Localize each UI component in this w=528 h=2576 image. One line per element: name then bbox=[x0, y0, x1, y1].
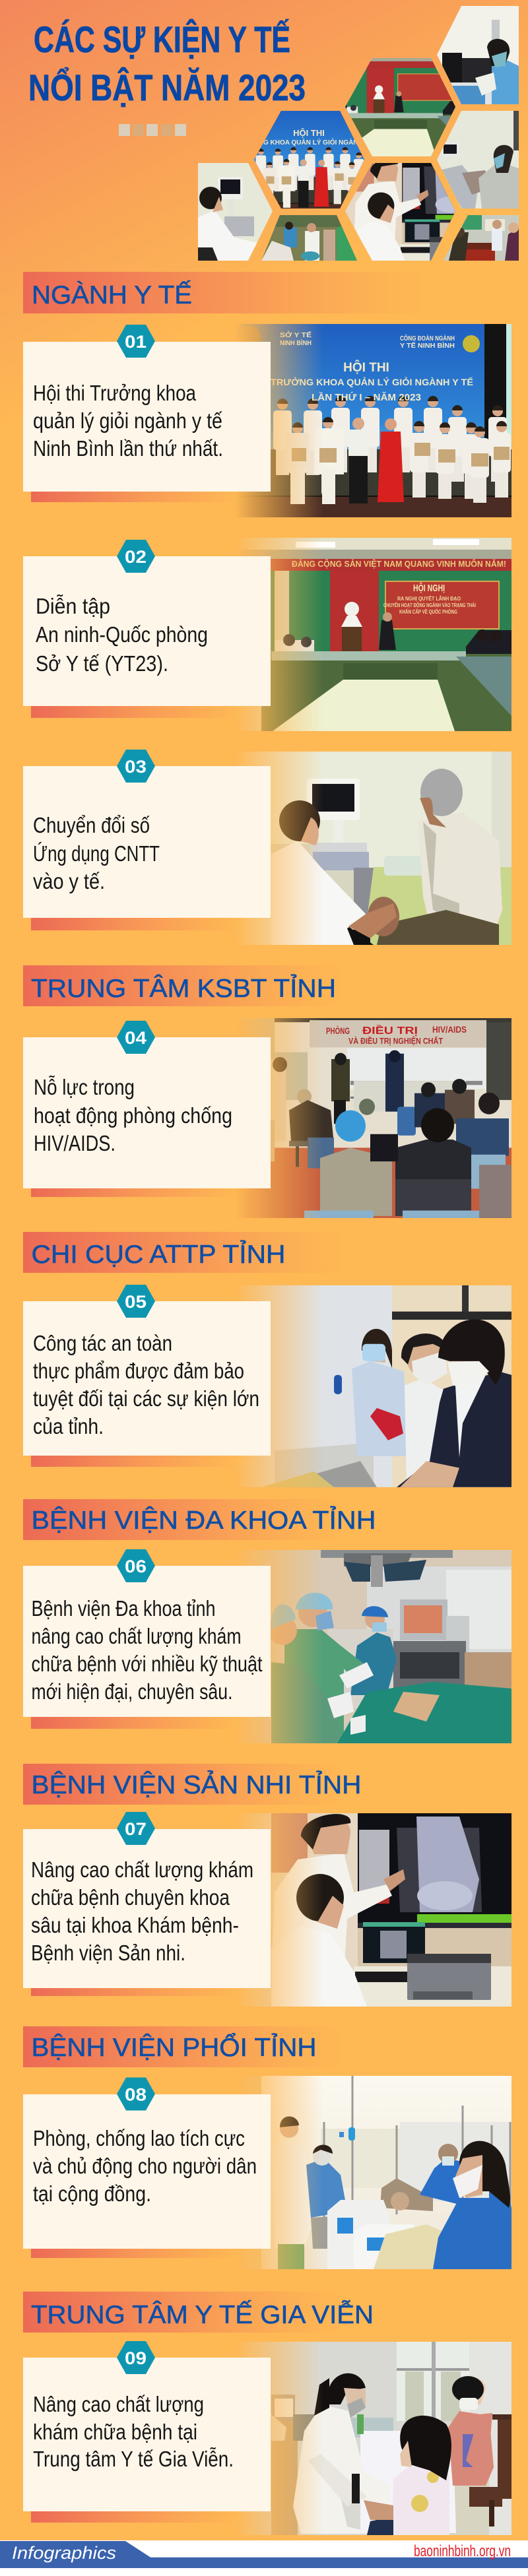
photo: award ceremony: LẦN THỨ I – NĂM 2023 bbox=[312, 391, 421, 403]
card text: Diễn tập bbox=[36, 594, 110, 618]
number badge bbox=[117, 1285, 155, 1318]
card text: và chủ động cho người dân bbox=[33, 2154, 257, 2178]
card text: Nâng cao chất lượng bbox=[33, 2392, 204, 2416]
card text bbox=[23, 1037, 271, 1188]
title: NỔI BẬT NĂM 2023 bbox=[28, 67, 306, 108]
footer: Infographics bbox=[12, 2543, 116, 2563]
number badge: 02 bbox=[125, 547, 147, 567]
number badge bbox=[117, 2341, 155, 2374]
card text bbox=[23, 2358, 271, 2511]
photo: defence drill meeting: RA NGHỊ QUYẾT LÃNH ĐẠO bbox=[397, 595, 461, 602]
section heading: CHI CỤC ATTP TỈNH bbox=[23, 1232, 426, 1273]
item 06 bbox=[23, 1549, 512, 1743]
card text: Chuyển đổi số bbox=[33, 813, 150, 837]
photo: award ceremony: SỞ Y TẾ bbox=[280, 331, 312, 339]
card text: thực phẩm được đảm bảo bbox=[33, 1359, 244, 1383]
number badge bbox=[117, 1549, 155, 1582]
footer bbox=[0, 2540, 528, 2576]
photo: defence drill meeting: CHUYỂN HOẠT ĐỘNG NGÀNH VÀO TRẠNG THÁI bbox=[383, 602, 476, 608]
card text bbox=[23, 2094, 271, 2249]
hexagon photo: ultrasound room bbox=[436, 111, 519, 210]
decorative squares bbox=[119, 124, 186, 136]
hexagon photo: meeting hall bbox=[345, 58, 455, 156]
photo: x-ray review bbox=[235, 1813, 512, 2007]
card text: nâng cao chất lượng khám bbox=[32, 1624, 242, 1648]
section heading: BỆNH VIỆN SẢN NHI TỈNH bbox=[23, 1764, 426, 1805]
hexagon photo: x-ray monitor bbox=[345, 163, 455, 261]
photo: HIV/AIDS treatment room: VÀ ĐIỀU TRỊ NGHIỆN CHẤT bbox=[348, 1036, 443, 1046]
photo: defence drill meeting: KHẨN CẤP VỀ QUỐC PHÒNG bbox=[399, 608, 457, 615]
number badge: 06 bbox=[125, 1557, 147, 1576]
card text: An ninh-Quốc phòng bbox=[36, 622, 208, 647]
card text: HIV/AIDS. bbox=[34, 1131, 116, 1155]
section heading: TRUNG TÂM Y TẾ GIA VIỄN: TRUNG TÂM Y TẾ GIA VIỄN bbox=[31, 2300, 374, 2329]
section heading: CHI CỤC ATTP TỈNH: CHI CỤC ATTP TỈNH bbox=[32, 1240, 285, 1269]
hexagon photo: community clinic bbox=[444, 215, 519, 261]
title: CÁC SỰ KIỆN Y TẾ bbox=[34, 18, 290, 60]
number badge: 04 bbox=[125, 1028, 147, 1048]
item 09 bbox=[23, 2341, 512, 2536]
number badge: 09 bbox=[125, 2348, 147, 2368]
card text: tại cộng đồng. bbox=[33, 2181, 151, 2206]
photo: ultrasound exam bbox=[235, 752, 512, 945]
card text bbox=[23, 1829, 271, 1988]
photo: operating room bbox=[235, 1550, 512, 1743]
card text: của tỉnh. bbox=[33, 1414, 104, 1438]
item 01 bbox=[23, 324, 512, 517]
card text: Bệnh viện Đa khoa tỉnh bbox=[32, 1596, 215, 1621]
card text: Trung tâm Y tế Gia Viễn. bbox=[33, 2447, 234, 2471]
number badge: 07 bbox=[125, 1819, 147, 1839]
section heading: TRUNG TÂM KSBT TỈNH: TRUNG TÂM KSBT TỈNH bbox=[31, 974, 336, 1003]
photo: award ceremony: Y TẾ NINH BÌNH bbox=[400, 341, 455, 350]
card text: Sở Y tế (YT23). bbox=[36, 651, 168, 676]
photo: award ceremony: NINH BÌNH bbox=[280, 338, 312, 347]
item 08 bbox=[23, 2076, 512, 2269]
item 05 bbox=[23, 1285, 512, 1487]
card text: Bệnh viện Sản nhi. bbox=[31, 1941, 185, 1965]
card text: Phòng, chống lao tích cực bbox=[33, 2126, 245, 2150]
item 02 bbox=[23, 538, 512, 731]
card text: chữa bệnh chuyên khoa bbox=[31, 1885, 230, 1910]
hexagon photo collage bbox=[198, 6, 519, 267]
photo: hospital ward bbox=[235, 2076, 512, 2269]
hexagon photo: award ceremony bbox=[254, 111, 364, 209]
section heading: BỆNH VIỆN ĐA KHOA TỈNH bbox=[23, 1499, 426, 1540]
photo: award ceremony: CÔNG ĐOÀN NGÀNH bbox=[400, 334, 455, 342]
card text: Ninh Bình lần thứ nhất. bbox=[33, 436, 223, 461]
hexagon photo: award ceremony: TRƯỞNG KHOA QUẢN LÝ GIỎI NGÀNH Y TẾ bbox=[239, 138, 380, 146]
section heading: NGÀNH Y TẾ: NGÀNH Y TẾ bbox=[32, 280, 192, 309]
card text: chữa bệnh với nhiều kỹ thuật bbox=[32, 1652, 263, 1676]
number badge bbox=[117, 540, 155, 573]
card text: hoạt động phòng chống bbox=[34, 1103, 232, 1128]
card text bbox=[23, 1566, 271, 1717]
photo: blood pressure check bbox=[235, 2342, 512, 2536]
number badge: 05 bbox=[125, 1292, 147, 1312]
number badge bbox=[117, 1812, 155, 1845]
hexagon photo: outdoor health check bbox=[261, 215, 357, 261]
item 07 bbox=[23, 1812, 512, 2007]
card text: khám chữa bệnh tại bbox=[33, 2420, 197, 2444]
card text: mới hiện đại, chuyên sâu. bbox=[32, 1679, 232, 1704]
card text: Nỗ lực trong bbox=[34, 1075, 135, 1099]
card text: Nâng cao chất lượng khám bbox=[31, 1857, 253, 1882]
number badge bbox=[117, 325, 155, 358]
title bbox=[28, 18, 306, 108]
hexagon photo: staff at printer bbox=[436, 6, 519, 105]
number badge bbox=[117, 1021, 155, 1054]
card text: sâu tại khoa Khám bệnh- bbox=[31, 1913, 239, 1937]
photo: HIV/AIDS treatment room: PHÒNG bbox=[326, 1025, 350, 1036]
photo: HIV/AIDS treatment room: HIV/AIDS bbox=[432, 1024, 467, 1035]
number badge: 01 bbox=[125, 332, 147, 352]
photo: defence drill meeting: ĐẢNG CỘNG SẢN VIỆT NAM QUANG VINH MUÔN NĂM! bbox=[292, 559, 506, 569]
photo: award ceremony: HỘI THI bbox=[343, 360, 389, 375]
photo: award ceremony bbox=[235, 324, 512, 517]
section heading: TRUNG TÂM Y TẾ GIA VIỄN bbox=[23, 2292, 426, 2333]
photo: food safety check bbox=[235, 1285, 512, 1487]
photo: HIV/AIDS treatment room bbox=[235, 1018, 512, 1218]
photo: defence drill meeting: HỘI NGHỊ bbox=[413, 582, 445, 594]
number badge: 03 bbox=[125, 757, 147, 777]
hexagon photo: award ceremony: HỘI THI bbox=[293, 128, 325, 138]
number badge bbox=[117, 2077, 155, 2110]
section heading: BỆNH VIỆN SẢN NHI TỈNH: BỆNH VIỆN SẢN NHI TỈNH bbox=[32, 1770, 362, 1799]
section heading: BỆNH VIỆN PHỔI TỈNH: BỆNH VIỆN PHỔI TỈNH bbox=[32, 2032, 317, 2062]
card text bbox=[23, 556, 271, 706]
card text bbox=[23, 1301, 271, 1456]
section heading: TRUNG TÂM KSBT TỈNH bbox=[23, 965, 426, 1006]
section heading: NGÀNH Y TẾ bbox=[23, 272, 528, 313]
card text: tuyệt đối tại các sự kiện lớn bbox=[33, 1386, 259, 1411]
item 03 bbox=[23, 750, 512, 945]
card text: Ứng dụng CNTT bbox=[33, 841, 160, 866]
card text bbox=[23, 342, 271, 492]
photo: defence drill meeting bbox=[235, 538, 512, 731]
section heading: BỆNH VIỆN PHỔI TỈNH bbox=[23, 2026, 426, 2067]
number badge: 08 bbox=[125, 2085, 147, 2105]
card text: quản lý giỏi ngành y tế bbox=[33, 408, 222, 433]
card text: Công tác an toàn bbox=[33, 1331, 172, 1355]
section heading: BỆNH VIỆN ĐA KHOA TỈNH: BỆNH VIỆN ĐA KHOA TỈNH bbox=[32, 1506, 376, 1535]
card text: Hội thi Trưởng khoa bbox=[33, 381, 197, 405]
card text bbox=[23, 766, 271, 918]
card text: vào y tế. bbox=[33, 869, 105, 893]
item 04 bbox=[23, 1018, 512, 1218]
number badge bbox=[117, 750, 155, 783]
photo: HIV/AIDS treatment room: ĐIỀU TRỊ bbox=[362, 1024, 418, 1037]
photo: award ceremony: TRƯỞNG KHOA QUẢN LÝ GIỎI NGÀNH Y TẾ bbox=[271, 376, 473, 387]
hexagon photo: ultrasound doctor bbox=[198, 163, 274, 262]
